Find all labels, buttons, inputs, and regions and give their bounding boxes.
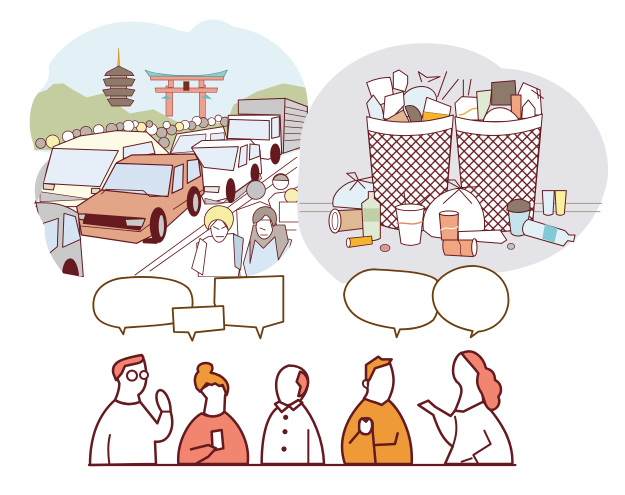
speech bubble 3 bbox=[214, 276, 283, 338]
truck bbox=[227, 98, 307, 164]
trash in left bin bbox=[367, 70, 458, 123]
coffee cup bbox=[507, 199, 530, 236]
crowd bbox=[36, 115, 230, 148]
road lines bbox=[135, 157, 297, 275]
bottle cap bbox=[380, 244, 390, 252]
person 5 with red hair bbox=[418, 351, 512, 464]
orange can on side bbox=[443, 239, 477, 257]
person 1 with glasses bbox=[90, 355, 172, 465]
torii gate bbox=[145, 70, 227, 117]
brown paper cup on side bbox=[329, 209, 363, 233]
speech bubble 4 bbox=[344, 269, 440, 337]
wall lines bbox=[300, 203, 602, 212]
white cup with straws bbox=[396, 192, 430, 245]
person 3 balding man bbox=[262, 366, 324, 464]
person 2 with phone bbox=[178, 363, 248, 464]
crowd left grey figure bbox=[35, 160, 48, 203]
trees bbox=[20, 83, 310, 150]
right mesh bin bbox=[455, 114, 542, 231]
van behind bbox=[170, 127, 227, 153]
bottom left car bbox=[36, 203, 83, 277]
small cap bbox=[507, 243, 515, 249]
table line bbox=[89, 461, 515, 468]
scene: crowded sightseeing traffic bbox=[30, 20, 308, 277]
background pedestrians bbox=[237, 174, 300, 277]
speech bubble 1 bbox=[93, 277, 193, 334]
grey blob background bbox=[297, 43, 608, 283]
orange cup bbox=[439, 211, 458, 240]
trash in right bin bbox=[455, 79, 543, 122]
fallen water bottle bbox=[523, 219, 575, 246]
road ground bbox=[34, 150, 300, 160]
pagoda bbox=[103, 48, 135, 106]
speech bubble 5 bbox=[433, 266, 508, 337]
person 4 in orange bbox=[342, 357, 412, 464]
brown car bbox=[77, 154, 204, 243]
pair of cups bbox=[542, 191, 566, 215]
angry pedestrian with blond hair bbox=[192, 206, 243, 277]
green bottle bbox=[362, 192, 380, 240]
sky bbox=[34, 20, 306, 160]
scene: overflowing trash bins bbox=[297, 43, 608, 283]
large cream van bbox=[33, 131, 168, 207]
large tied bag bbox=[423, 180, 485, 240]
speech bubbles and people bbox=[89, 266, 515, 465]
plastic straw wrapper bbox=[458, 230, 507, 243]
yellow can on side bbox=[346, 236, 372, 247]
left mesh bin bbox=[367, 115, 453, 231]
tied bag left bbox=[333, 173, 375, 210]
speech bubble 2 bbox=[173, 306, 224, 341]
angry pedestrian with backpack bbox=[243, 207, 292, 277]
white car bbox=[192, 139, 262, 204]
